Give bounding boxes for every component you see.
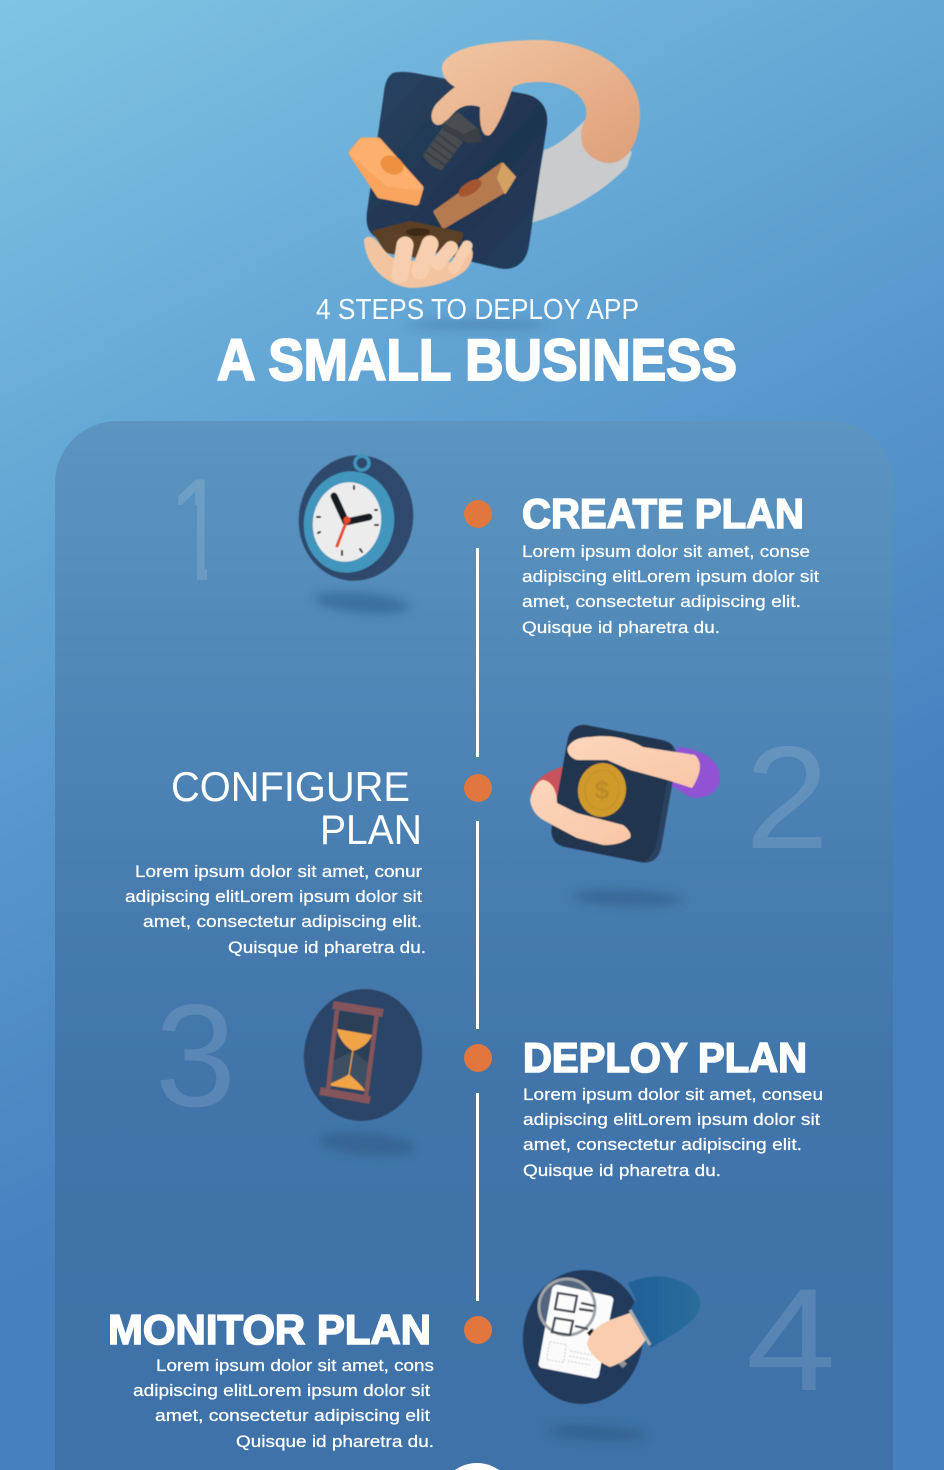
step 3 text [523,1034,823,1180]
step 1 body: Quisque id pharetra du. [522,618,720,637]
step 4 dot [464,1316,492,1344]
step 2 heading [171,763,422,853]
icon: hands holding coin: $ [595,775,610,805]
hero illustration: hands with nuts and bolt [352,40,640,288]
title: A SMALL BUSINESS [217,328,737,393]
step 3 [155,974,431,1159]
step 1 heading: CREATE PLAN [522,490,804,537]
step 3 shadow [317,1129,417,1159]
step 2 [530,716,829,908]
step 4 body [133,1356,434,1451]
step 1 dot [464,500,492,528]
step 4 body: adipiscing elitLorem ipsum dolor sit [133,1381,430,1400]
step 2 body: adipiscing elitLorem ipsum dolor sit [125,887,422,906]
step 4 body: Lorem ipsum dolor sit amet, cons [156,1356,434,1375]
step 1 body: adipiscing elitLorem ipsum dolor sit [522,567,819,586]
step 3 heading: DEPLOY PLAN [523,1034,807,1081]
step 4 body: amet, consectetur adipiscing elit [155,1406,430,1425]
step 1 body: amet, consectetur adipiscing elit. [522,592,801,611]
step 4 number: 4 [746,1258,836,1421]
step 4 body: Quisque id pharetra du. [236,1432,434,1451]
step 2 number: 2 [745,716,829,879]
title shadow [406,319,550,331]
step 1 body [522,542,819,637]
step 2 dot [464,774,492,802]
step 1 text [522,490,819,637]
step 4 text [108,1306,434,1451]
step 3 body: adipiscing elitLorem ipsum dolor sit [523,1110,820,1129]
step 4 heading: MONITOR PLAN [108,1306,431,1353]
step 4 [516,1258,836,1443]
step 3 body [523,1085,823,1180]
icon: clock [287,445,425,591]
step 2 body: amet, consectetur adipiscing elit. [143,912,422,931]
step 1 number: 1 [168,448,228,611]
step 1 shadow [313,589,411,617]
timeline: connector segments [476,548,479,1301]
step 3 body: Lorem ipsum dolor sit amet, conseu [523,1085,823,1104]
step 3 number: 3 [155,974,236,1137]
step 3 body: amet, consectetur adipiscing elit. [523,1135,802,1154]
timeline: end circle [439,1463,515,1470]
step 2 body [125,862,426,957]
step 4 shadow [547,1423,647,1443]
step 3 body: Quisque id pharetra du. [523,1161,721,1180]
step 2 text [125,763,426,957]
icon: magnifier over document [516,1264,700,1410]
step 2 body: Lorem ipsum dolor sit amet, conur [135,862,422,881]
step 2 heading: CONFIGURE [171,763,410,810]
step 1 body: Lorem ipsum dolor sit amet, conse [522,542,810,561]
step 2 heading: PLAN [320,806,422,853]
step 3 dot [464,1044,492,1072]
panel: steps [55,421,893,1470]
subtitle: 4 STEPS TO DEPLOY APP [316,294,639,326]
step 1 [178,454,414,616]
icon: hourglass [295,981,431,1129]
step 2 body: Quisque id pharetra du. [228,938,426,957]
step 2 shadow [572,888,682,908]
icon: hands holding coin [530,725,720,862]
